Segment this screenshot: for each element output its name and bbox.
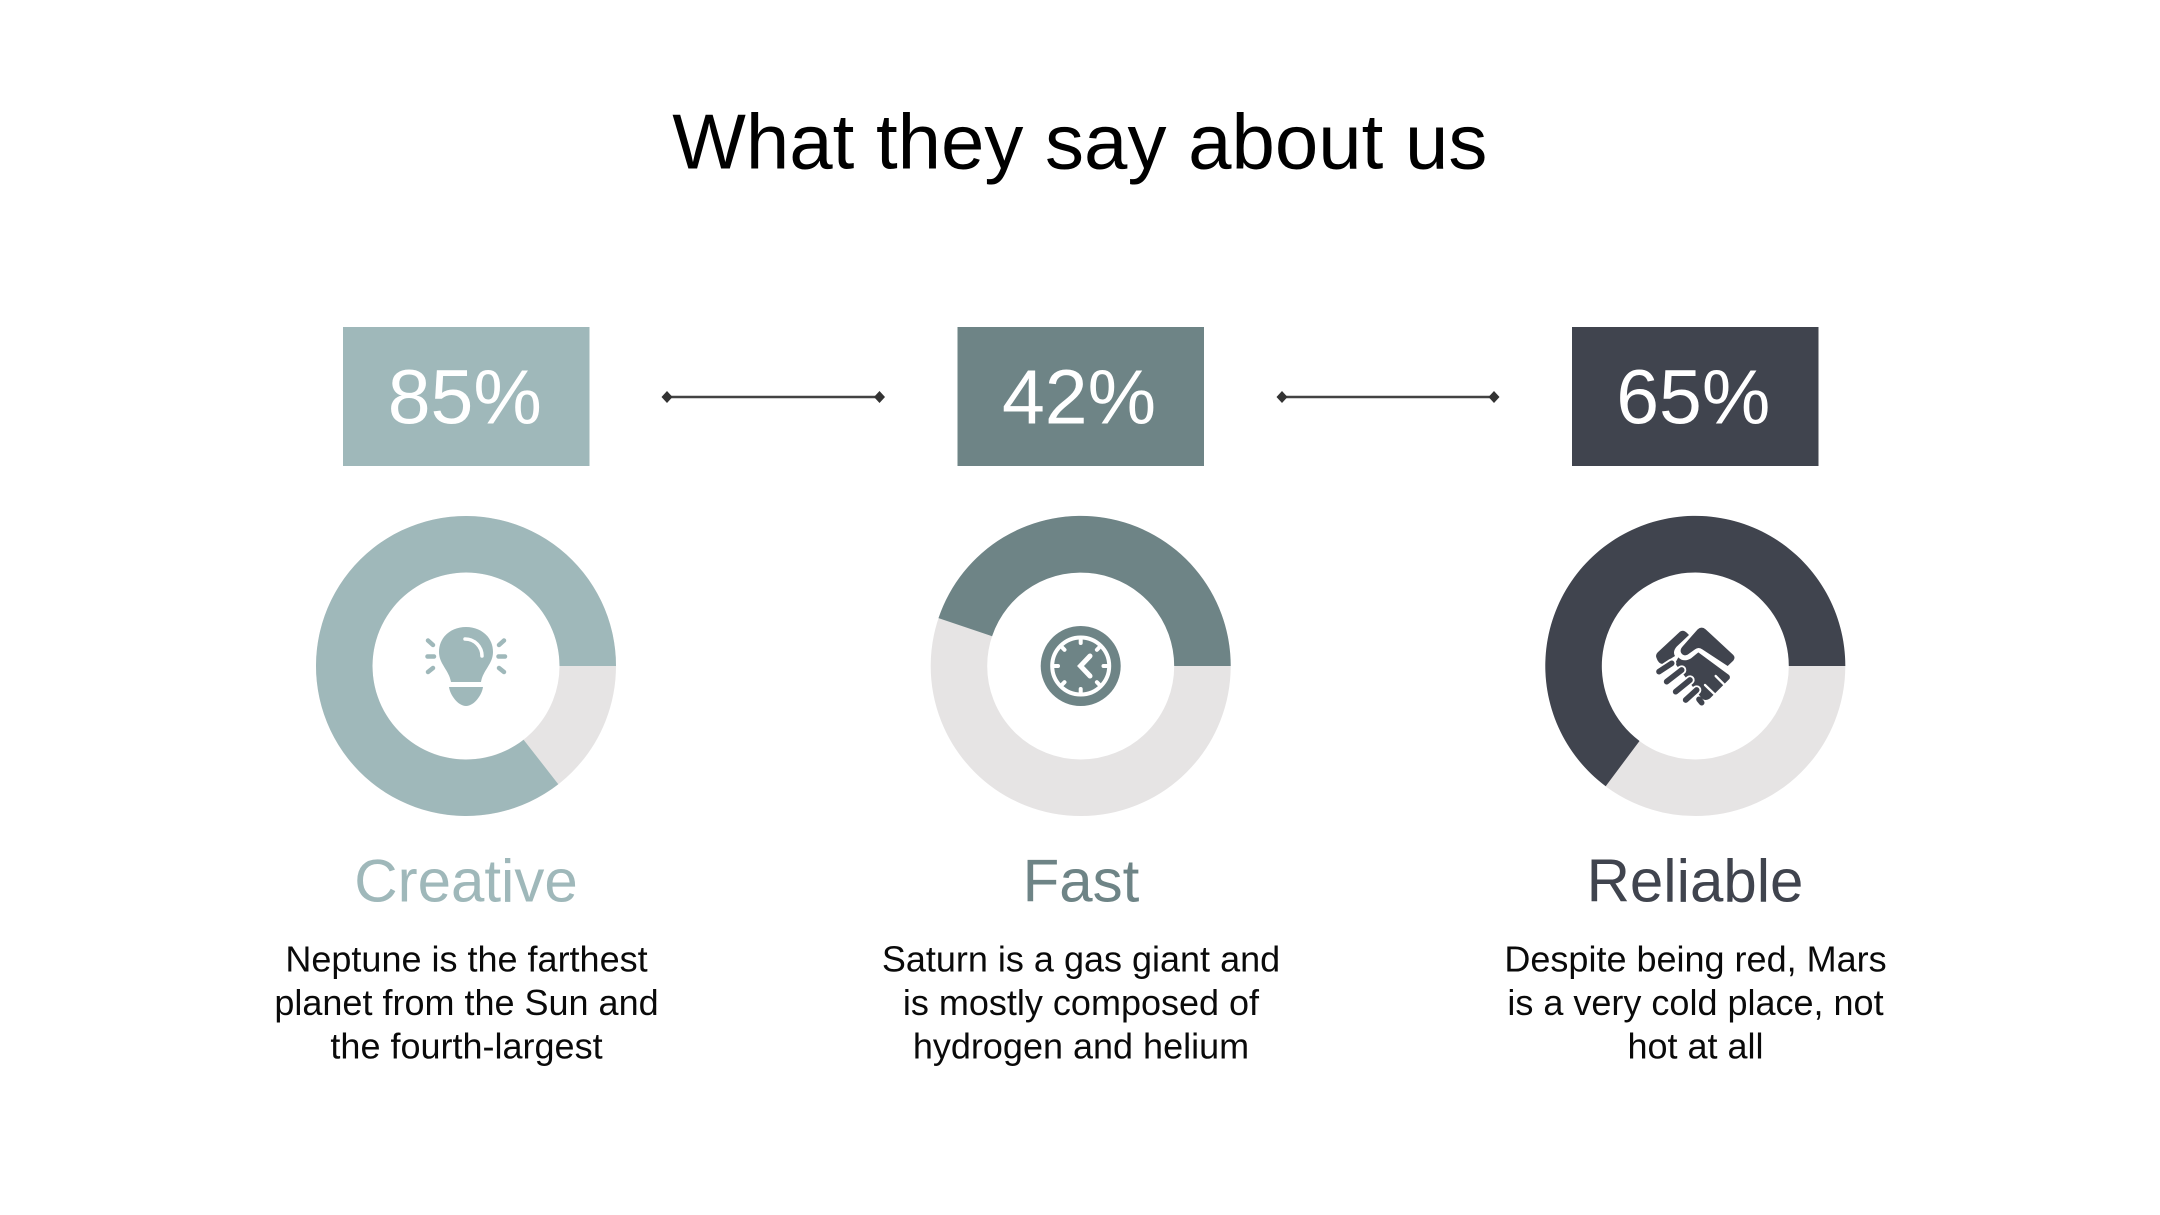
label: Creative: Creative [354, 848, 578, 914]
description: Reliable: Despite being red, Mars [1504, 938, 1887, 980]
connector line: Creative to Fast [662, 391, 885, 403]
description: Creative: planet from the Sun and [274, 982, 659, 1023]
description: Fast: hydrogen and helium [913, 1026, 1249, 1066]
label: Reliable: Reliable [1587, 848, 1803, 914]
panel: Creative [274, 327, 659, 1066]
connector line: Fast to Reliable [1276, 391, 1500, 403]
panel: Reliable [1504, 327, 1887, 1066]
panel: Fast [882, 327, 1280, 1066]
description: Fast: Saturn is a gas giant and [882, 938, 1280, 980]
description: Creative: Neptune is the farthest [285, 938, 648, 980]
percentage badge: 85% [343, 327, 590, 466]
icon: light bulb [428, 627, 505, 706]
description: Reliable: is a very cold place, not [1507, 982, 1884, 1023]
percentage badge: 42% [958, 327, 1204, 466]
icon: clock [1041, 626, 1121, 706]
percentage badge: 65% [1572, 327, 1818, 466]
description: Fast: is mostly composed of [903, 982, 1260, 1023]
icon: handshake [1656, 628, 1734, 703]
percentage badge: 85%: 85% [388, 354, 542, 440]
percentage badge: 65%: 65% [1616, 354, 1770, 440]
donut chart: 42% [938, 516, 1231, 788]
percentage badge: 42%: 42% [1002, 354, 1156, 440]
description: Creative: the fourth-largest [330, 1026, 603, 1066]
label: Fast: Fast [1023, 848, 1140, 914]
donut chart: 85% [316, 516, 616, 816]
donut chart: 65% [1545, 516, 1845, 788]
title: What they say about us [672, 98, 1487, 186]
description: Reliable: hot at all [1627, 1026, 1764, 1066]
